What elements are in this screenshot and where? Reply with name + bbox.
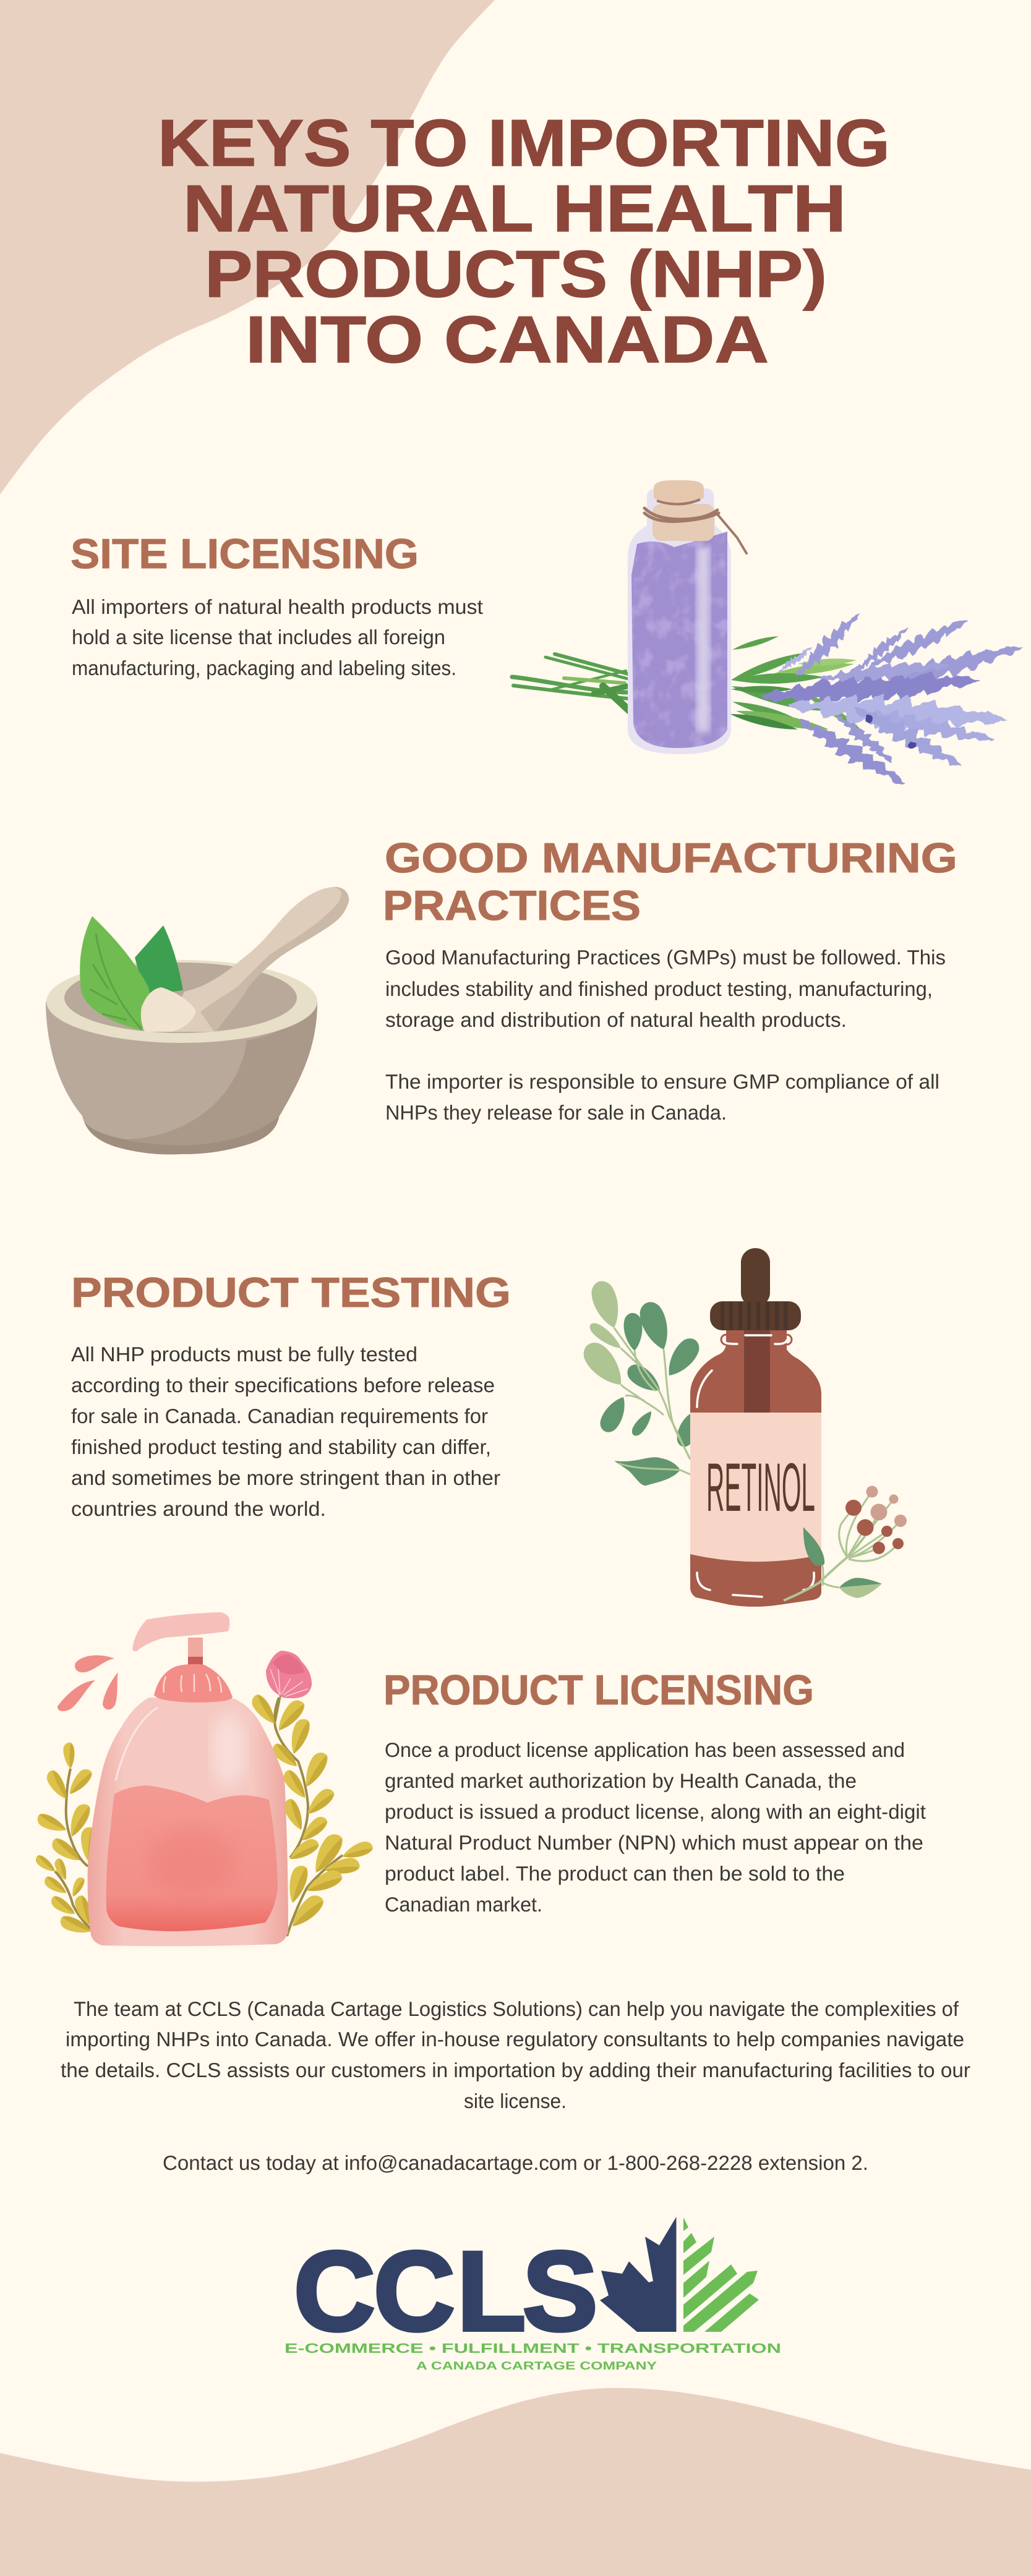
closing text block: importing NHPs into Canada. We offer in-house regulatory consultants to help companies navigate (66, 2028, 964, 2051)
panel: product testing (71, 1248, 907, 1607)
logo: CCLS (284, 2217, 781, 2372)
text block: product testing (71, 1343, 500, 1520)
text block: product testing: according to their specifications before release (71, 1374, 495, 1396)
icon: retinol dropper bottle: RETINOL (706, 1449, 815, 1526)
logo: CCLS: E-COMMERCE • FULFILLMENT • TRANSPORTATION (284, 2340, 781, 2356)
closing text block: the details. CCLS assists our customers in importation by adding their manufacturing facilities to our (61, 2059, 970, 2081)
text block: site licensing: All importers of natural health products must (72, 595, 483, 618)
heading: good manufacturing practices (383, 835, 957, 929)
text block: product testing: All NHP products must be fully tested (71, 1343, 417, 1366)
text block: good manufacturing practices (385, 946, 946, 1124)
heading: good manufacturing practices: GOOD MANUFACTURING (385, 835, 957, 882)
text block: good manufacturing practices: Good Manufacturing Practices (GMPs) must be followed. This (385, 946, 946, 969)
icon: lavender bottle (512, 480, 1026, 794)
text block: product licensing: Natural Product Number (NPN) which must appear on the (385, 1831, 923, 1854)
text block: product testing: finished product testing and stability can differ, (71, 1435, 491, 1458)
title: PRODUCTS (NHP) (205, 237, 827, 311)
heading: site licensing: SITE LICENSING (71, 530, 419, 577)
icon: pump soap bottle with leaves (33, 1612, 374, 1946)
text block: good manufacturing practices: storage and distribution of natural health products. (385, 1008, 847, 1031)
text block: site licensing: hold a site license that includes all foreign (72, 626, 445, 648)
panel: site licensing (71, 480, 1026, 794)
icon: mortar and pestle (46, 887, 349, 1155)
text block: product testing: for sale in Canada. Canadian requirements for (71, 1405, 488, 1427)
logo: CCLS: CCLS (294, 2228, 597, 2354)
title: INTO CANADA (246, 302, 769, 376)
title: NATURAL HEALTH (183, 171, 846, 245)
title (158, 106, 890, 376)
contact line: Contact us today at info@canadacartage.com or 1-800-268-2228 extension 2. (163, 2151, 868, 2174)
closing text block: The team at CCLS (Canada Cartage Logistics Solutions) can help you navigate the complexities of (74, 1997, 959, 2020)
top left decorative blob (0, 0, 495, 495)
panel: product licensing (33, 1612, 926, 1946)
text block: site licensing: manufacturing, packaging and labeling sites. (72, 657, 456, 679)
text block: good manufacturing practices: NHPs they release for sale in Canada. (385, 1101, 727, 1124)
panel: good manufacturing practices (46, 835, 957, 1155)
text block: product licensing (385, 1738, 926, 1916)
text block: product testing: and sometimes be more stringent than in other (71, 1466, 500, 1489)
text block: good manufacturing practices: The importer is responsible to ensure GMP compliance of all (385, 1070, 939, 1093)
heading: product testing: PRODUCT TESTING (71, 1269, 511, 1316)
icon: retinol dropper bottle (578, 1248, 907, 1607)
text block: product testing: countries around the world. (71, 1497, 326, 1520)
text block: product licensing: product is issued a product license, along with an eight-digit (385, 1800, 926, 1823)
closing text block: site license. (464, 2089, 567, 2112)
text block: site licensing (72, 595, 483, 679)
text block: product licensing: product label. The product can then be sold to the (385, 1862, 845, 1885)
logo: CCLS: A CANADA CARTAGE COMPANY (416, 2359, 657, 2372)
text block: product licensing: granted market authorization by Health Canada, the (385, 1769, 857, 1792)
text block: good manufacturing practices: includes stability and finished product testing, manufacturing, (385, 977, 933, 1000)
closing text block (61, 1997, 970, 2112)
heading: product licensing: PRODUCT LICENSING (383, 1667, 814, 1714)
heading: good manufacturing practices: PRACTICES (383, 882, 641, 929)
bottom decorative wave (0, 2388, 1031, 2576)
text block: product licensing: Canadian market. (385, 1893, 542, 1916)
title: KEYS TO IMPORTING (158, 106, 890, 180)
text block: product licensing: Once a product license application has been assessed and (385, 1738, 905, 1761)
